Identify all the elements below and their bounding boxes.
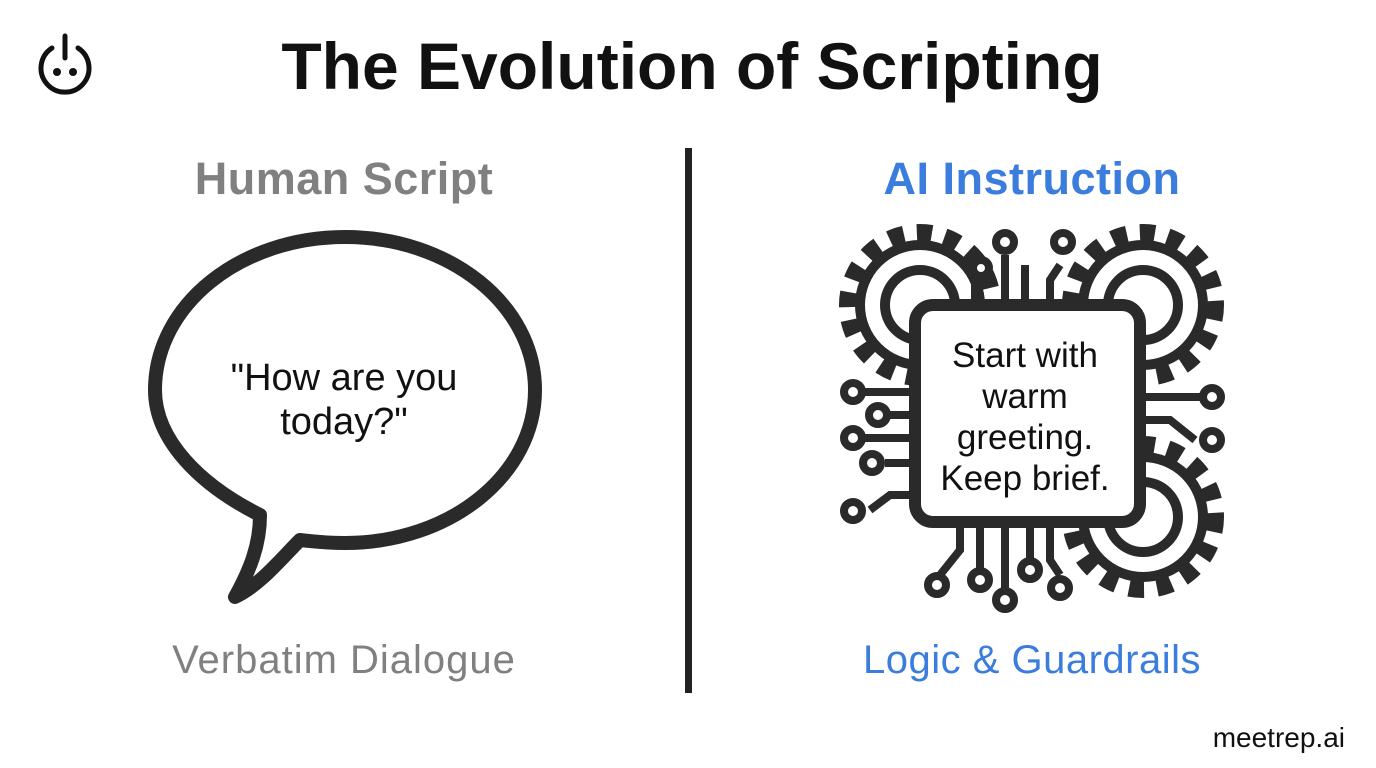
title: The Evolution of Scripting [281,29,1103,103]
icon: chip with gears [839,224,1225,613]
caption: Logic & Guardrails: Logic & Guardrails [863,638,1201,682]
chip text: Keep brief. [940,459,1110,498]
chip text [940,336,1110,498]
icon: power logo [38,34,92,95]
chip text: warm [982,377,1068,416]
bubble text: "How are you [231,357,457,399]
brand: meetrep.ai [1213,722,1345,753]
heading: Human Script: Human Script [195,153,493,204]
chip text: Start with [952,336,1098,375]
bubble text [231,357,457,443]
icon: speech bubble [148,230,542,604]
heading: AI Instruction: AI Instruction [884,153,1180,204]
caption: Verbatim Dialogue: Verbatim Dialogue [172,638,516,682]
bubble text: today?" [280,401,408,443]
divider [685,148,692,693]
chip text: greeting. [957,418,1093,457]
